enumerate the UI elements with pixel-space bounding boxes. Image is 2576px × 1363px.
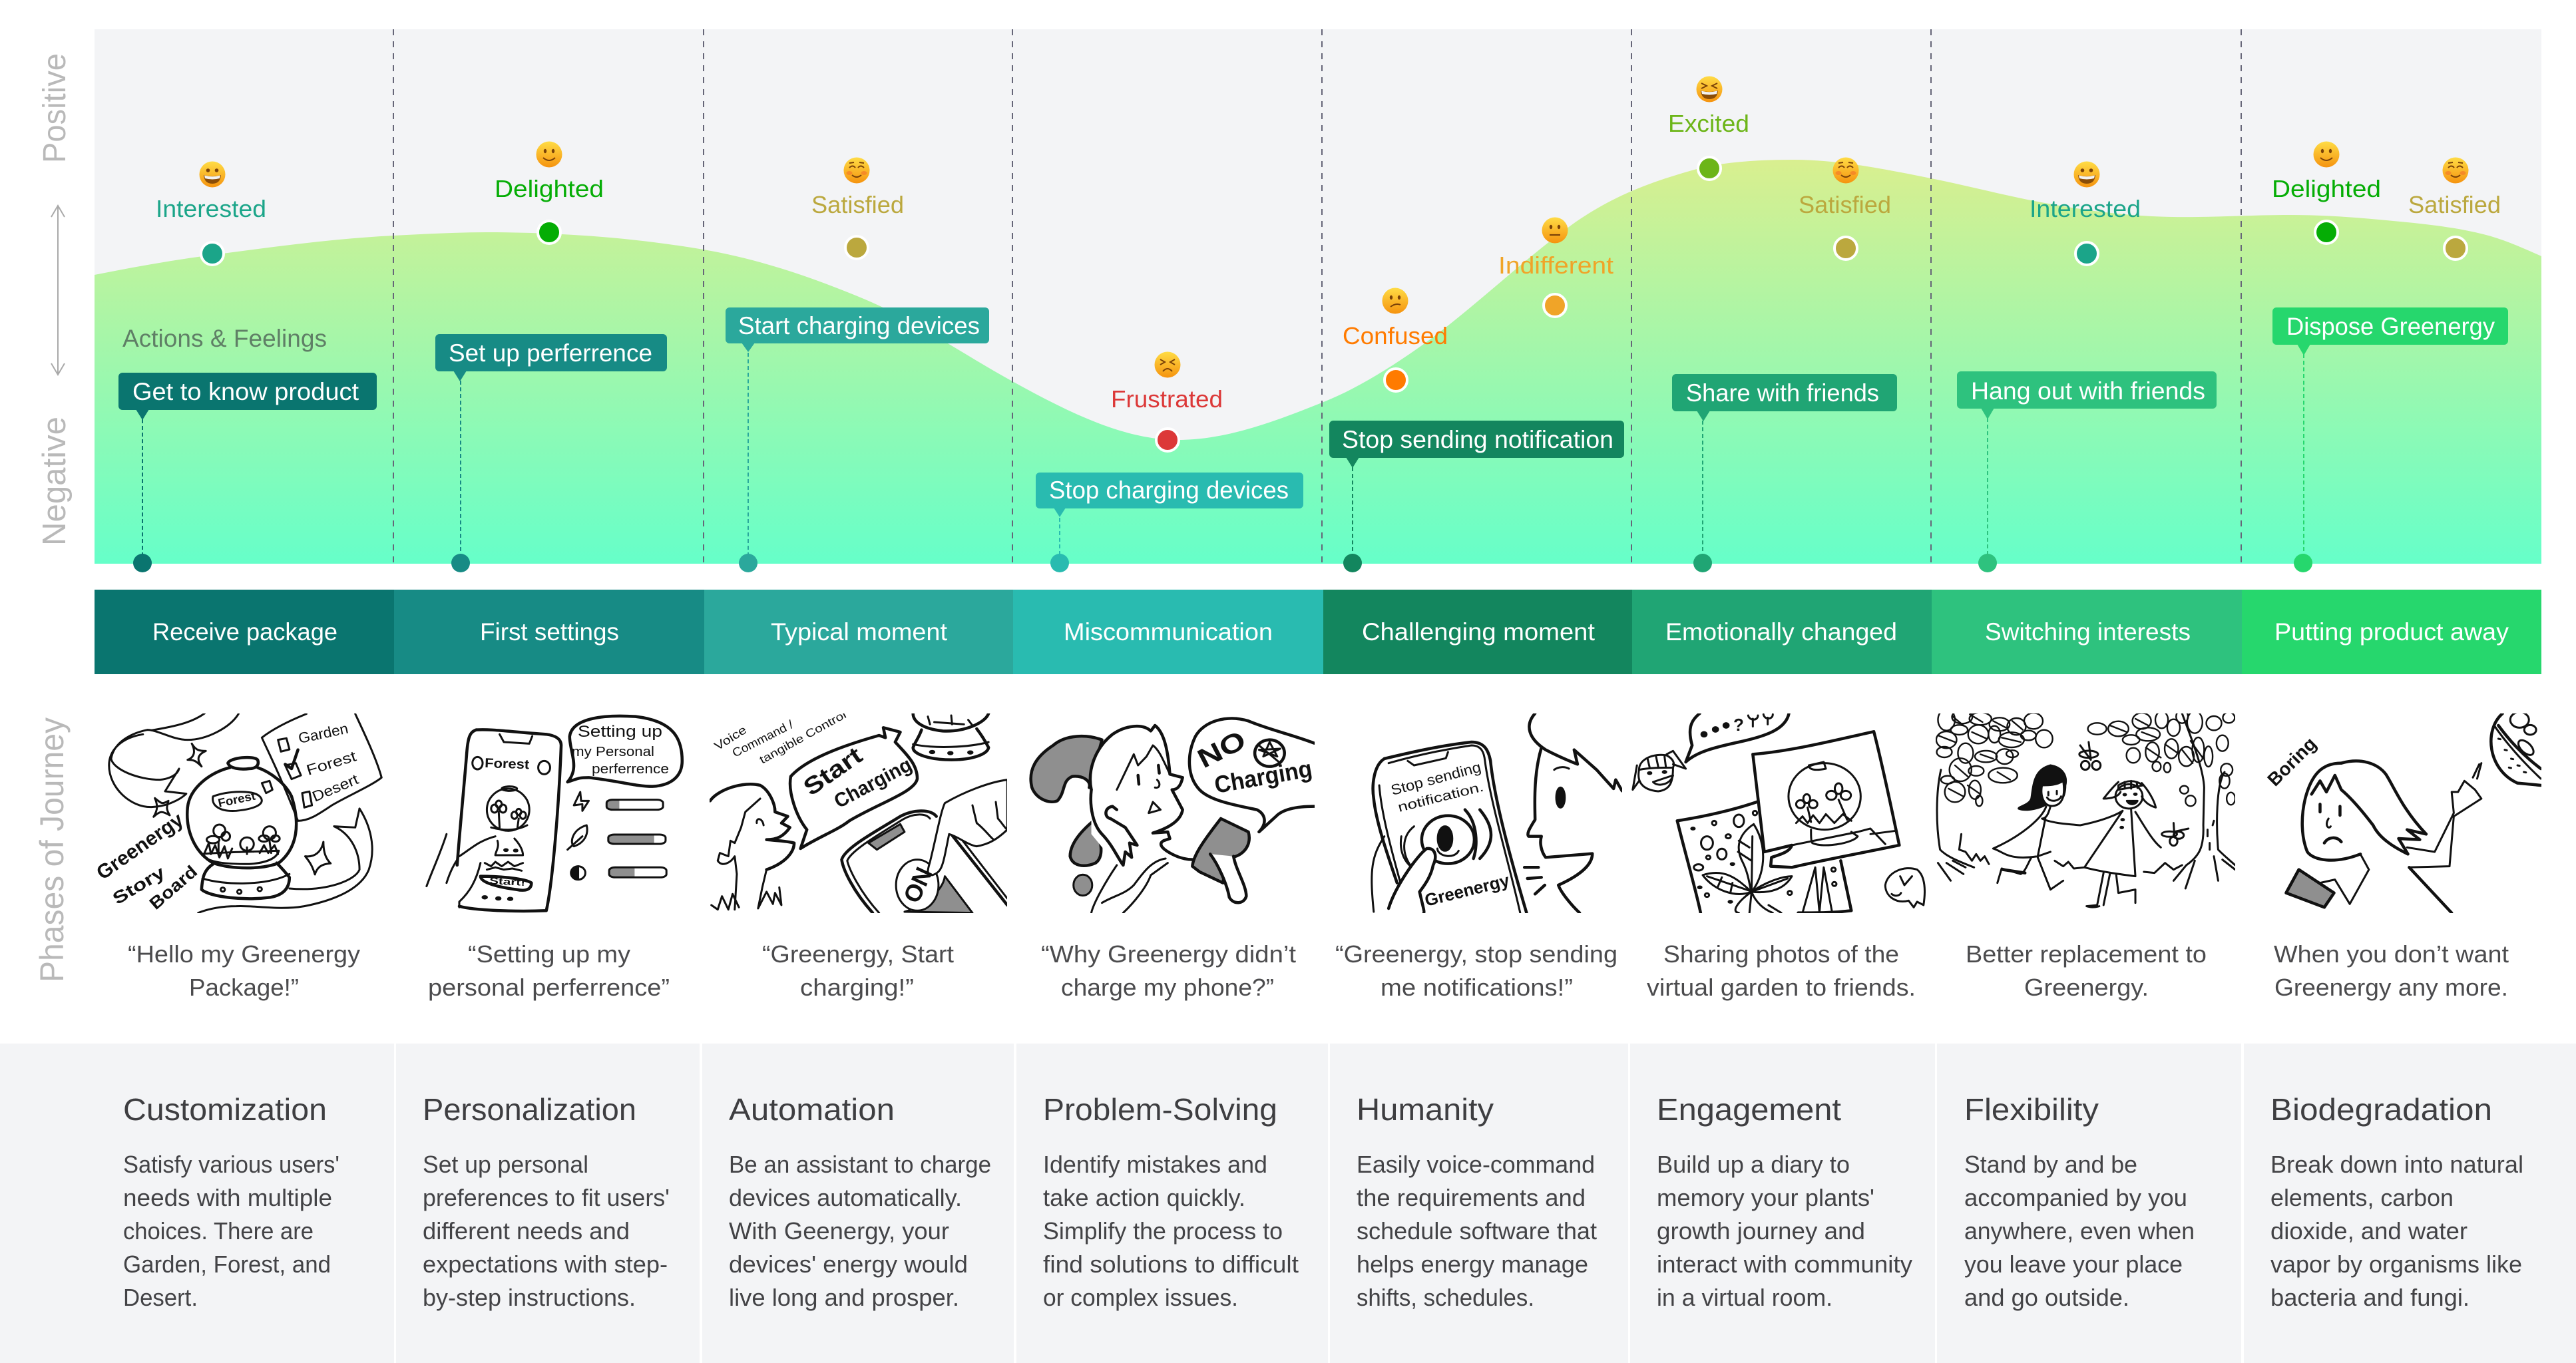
panel: opportunity Personalization: Personalization — [423, 1092, 636, 1127]
panel: opportunity Humanity: Humanity — [1357, 1092, 1494, 1127]
axis arrow: positive to negative — [51, 206, 65, 375]
sketch: phone with personal preference sliders: my Personal — [572, 745, 654, 759]
callout: Dispose Greenergy — [2272, 307, 2508, 572]
panel: opportunity Personalization: different needs and — [423, 1217, 630, 1245]
phase bar: Putting product away: Putting product away — [2274, 618, 2509, 646]
panel: opportunity Humanity: Easily voice-command — [1357, 1151, 1595, 1178]
phase bar: Miscommunication — [1013, 590, 1323, 674]
panel: opportunity Customization: Customization — [123, 1092, 327, 1127]
quote: Why Greenergy didn't charge my phone — [1041, 940, 1296, 1001]
panel: emotion curve chart — [95, 29, 2541, 564]
quote: Greenergy, stop sending me notifications: me notifications!” — [1381, 974, 1573, 1001]
sketch: start charging voice command: Voice — [712, 723, 749, 753]
panel: opportunity Automation: devices' energy would — [729, 1251, 968, 1278]
panel: opportunity Biodegradation: elements, carbon — [2270, 1184, 2454, 1211]
sketch: no charging confused user — [1031, 718, 1314, 913]
callout: Get to know product — [118, 373, 377, 572]
sketch: start charging voice command: tangible Control — [757, 708, 849, 766]
panel: opportunity Flexibility: you leave your place — [1964, 1251, 2183, 1278]
emotion: Confused — [1343, 288, 1448, 391]
sketch: storyboard jar with options: Board — [145, 861, 201, 914]
callout: Get to know product: Get to know product — [132, 378, 359, 405]
quote: Hello my Greenergy Package: “Hello my Greenergy — [128, 940, 360, 968]
emotion: Satisfied (share) — [1799, 157, 1891, 260]
callout: Start charging devices: Start charging devices — [738, 312, 980, 339]
quote: Sharing photos — [1647, 940, 1916, 1001]
sketch: storyboard jar with options — [93, 713, 381, 914]
emotion: Excited — [1668, 76, 1749, 180]
panel: opportunity Customization: Desert. — [123, 1284, 198, 1311]
quote: Better replacement: Better replacement to — [1966, 940, 2207, 968]
sketch: phone with personal preference sliders: Start! — [489, 875, 526, 888]
sketch: start charging voice command: Start — [798, 741, 867, 801]
callout: Stop sending notification — [1329, 421, 1624, 572]
quote: Better replacement: Greenergy. — [2024, 974, 2149, 1001]
quote: Greenergy, Start charging — [762, 940, 954, 1001]
sketch: stop sending notification phone and face: Stop sending — [1389, 759, 1483, 799]
emotion: Satisfied (dispose): Satisfied — [2408, 191, 2501, 218]
sketch: friends dancing among trees — [1936, 709, 2235, 907]
callout: Stop charging devices: Stop charging devices — [1049, 477, 1289, 504]
emotion: Interested (switching): Interested — [2030, 195, 2141, 222]
quote: When you don't want Greenergy: Greenergy any more. — [2274, 974, 2508, 1001]
sketch: boring, throwing product away: Boring — [2263, 733, 2320, 790]
emotion: Interested — [156, 161, 266, 265]
panel: opportunity Engagement: memory your plants' — [1657, 1184, 1874, 1211]
sketch: storyboard jar with options: Greenergy — [93, 809, 188, 884]
sketch: sharing photos of virtual garden: ? — [1733, 715, 1744, 735]
phase bar: Typical moment: Typical moment — [771, 618, 948, 646]
panel: opportunity Flexibility: and go outside. — [1964, 1284, 2129, 1311]
quote: Greenergy, stop sending me notifications: “Greenergy, stop sending — [1335, 940, 1617, 968]
heading: Actions & Feelings: Actions & Feelings — [122, 325, 327, 352]
callout: Dispose Greenergy: Dispose Greenergy — [2286, 313, 2495, 340]
emotion: Satisfied: Satisfied — [811, 191, 904, 218]
phase bar: Switching interests: Switching interests — [1985, 618, 2191, 646]
axis label: Positive: Positive — [37, 53, 73, 163]
phase bar: Emotionally changed — [1632, 590, 1932, 674]
callout: Hang out with friends — [1957, 371, 2217, 572]
panel: opportunity Biodegradation: Break down into natural — [2270, 1151, 2523, 1178]
panel: opportunity Humanity — [1330, 1044, 1628, 1363]
quote: Why Greenergy didn't charge my phone: charge my phone?” — [1061, 974, 1274, 1001]
quote: Greenergy, stop sending me notifications — [1335, 940, 1617, 1001]
emotion: Delighted (dispose) — [2272, 141, 2381, 244]
phase bar: Switching interests — [1932, 590, 2242, 674]
panel: opportunity Customization: Garden, Forest, and — [123, 1251, 331, 1278]
callout: Set up perferrence: Set up perferrence — [449, 339, 652, 367]
emotion: Confused: Confused — [1343, 322, 1448, 349]
callout: Start charging devices — [726, 307, 989, 572]
axis label: Phases of Journey: Phases of Journey — [33, 717, 71, 982]
emotion: Satisfied — [811, 157, 904, 259]
panel: opportunity Personalization: preferences to fit users' — [423, 1184, 670, 1211]
callout: Share with friends — [1672, 374, 1897, 572]
panel: opportunity Automation: With Geenergy, your — [729, 1217, 949, 1245]
panel: opportunity Problem-Solving: take action quickly. — [1043, 1184, 1245, 1211]
emotion: Delighted — [495, 141, 604, 244]
sketch: no charging confused user: Charging — [1212, 755, 1314, 799]
emotion: Interested (switching) — [2030, 161, 2141, 265]
callout: Set up perferrence — [435, 334, 667, 572]
sketch: boring, throwing product away — [2263, 712, 2541, 913]
panel: opportunity Personalization: Set up personal — [423, 1151, 588, 1178]
sketch: phone with personal preference sliders: Forest — [485, 756, 530, 772]
panel: opportunity Biodegradation — [2244, 1044, 2576, 1363]
sketch: no charging confused user: NO — [1193, 725, 1251, 774]
panel: opportunity Automation: live long and prosper. — [729, 1284, 959, 1311]
panel: opportunity Biodegradation: dioxide, and water — [2270, 1217, 2468, 1245]
panel: opportunity Engagement — [1630, 1044, 1935, 1363]
quote: Why Greenergy didn't charge my phone: “Why Greenergy didn’t — [1041, 940, 1296, 968]
phase bar: First settings: First settings — [480, 618, 619, 646]
emotion: Delighted (dispose): Delighted — [2272, 175, 2381, 202]
quote: Hello my Greenergy Package: Package!” — [189, 974, 299, 1001]
emotion: Satisfied (dispose) — [2408, 157, 2501, 260]
quote: Setting up my personal perferrence: “Setting up my — [468, 940, 630, 968]
quote: Sharing photos: Sharing photos of the — [1663, 940, 1899, 968]
sketch: stop sending notification phone and face: notification. — [1396, 780, 1485, 815]
emotion: Indifferent: Indifferent — [1498, 252, 1613, 279]
panel: opportunity Personalization: by-step instructions. — [423, 1284, 636, 1311]
sketch: start charging voice command: Command / — [730, 717, 795, 760]
emotion: Excited: Excited — [1668, 110, 1749, 137]
sketch: sharing photos of virtual garden — [1633, 713, 1925, 913]
panel: opportunity Problem-Solving: find solutions to difficult — [1043, 1251, 1299, 1278]
emotion: Frustrated — [1111, 351, 1223, 451]
sketch: stop sending notification phone and face: Greenergy — [1422, 870, 1512, 910]
emotion area curve — [95, 160, 2541, 564]
sketch: storyboard jar with options: Forest — [304, 747, 358, 779]
emotion: Frustrated: Frustrated — [1111, 385, 1223, 413]
panel: opportunity Problem-Solving — [1016, 1044, 1328, 1363]
sketch: phone with personal preference sliders: perferrence — [592, 762, 669, 777]
sketch: storyboard jar with options: Garden — [297, 720, 349, 747]
sketch: stop sending notification phone and face — [1372, 713, 1622, 913]
quote: Sharing photos: virtual garden to friends. — [1647, 974, 1916, 1001]
panel: opportunity Flexibility — [1937, 1044, 2241, 1363]
callout: Hang out with friends: Hang out with friends — [1971, 377, 2205, 405]
sketch: phone with personal preference sliders — [427, 716, 682, 911]
phase bar: Miscommunication: Miscommunication — [1064, 618, 1273, 646]
quote: Greenergy, Start charging: charging!” — [800, 974, 914, 1001]
phase bar: Receive package — [95, 590, 394, 674]
panel: opportunity Humanity: helps energy manage — [1357, 1251, 1588, 1278]
panel: opportunity Problem-Solving: Identify mistakes and — [1043, 1151, 1267, 1178]
quote: Greenergy, Start charging: “Greenergy, Start — [762, 940, 954, 968]
panel: opportunity Automation: Automation — [729, 1092, 895, 1127]
sketch: phone with personal preference sliders: Setting up — [578, 723, 662, 741]
quote: When you don't want Greenergy — [2274, 940, 2509, 1001]
sketch: storyboard jar with options: Forest — [217, 789, 257, 810]
panel: opportunity Biodegradation: vapor by organisms like — [2270, 1251, 2522, 1278]
panel: opportunity Problem-Solving: Simplify the process to — [1043, 1217, 1283, 1245]
panel: opportunity Customization: choices. There are — [123, 1217, 314, 1245]
panel: opportunity Flexibility: anywhere, even when — [1964, 1217, 2195, 1245]
panel: opportunity Problem-Solving: Problem-Solving — [1043, 1092, 1277, 1127]
panel: opportunity Biodegradation: bacteria and fungi. — [2270, 1284, 2469, 1311]
panel: opportunity Humanity: the requirements and — [1357, 1184, 1586, 1211]
panel: opportunity Biodegradation: Biodegradation — [2270, 1092, 2492, 1127]
panel: opportunity Engagement: Engagement — [1657, 1092, 1841, 1127]
phase bar: First settings — [394, 590, 704, 674]
quote: When you don't want Greenergy: When you don’t want — [2274, 940, 2509, 968]
panel: opportunity Personalization: expectations with step- — [423, 1251, 668, 1278]
sketch: storyboard jar with options: Story — [109, 862, 168, 908]
axis label: Negative: Negative — [37, 417, 73, 546]
sketch: start charging voice command — [710, 708, 1007, 913]
phase bar: Putting product away — [2242, 590, 2541, 674]
panel: opportunity Engagement: Build up a diary to — [1657, 1151, 1850, 1178]
quote: Setting up my personal perferrence: personal perferrence” — [428, 974, 670, 1001]
sketch: start charging voice command: Charging — [831, 753, 915, 813]
emotion: Indifferent — [1498, 217, 1613, 317]
panel: opportunity Flexibility: accompanied by you — [1964, 1184, 2187, 1211]
callout: Stop charging devices — [1036, 473, 1303, 572]
emotion: Satisfied (share): Satisfied — [1799, 191, 1891, 218]
emotion: Delighted: Delighted — [495, 175, 604, 202]
callout: Stop sending notification: Stop sending notification — [1342, 426, 1613, 453]
panel: opportunity Problem-Solving: or complex issues. — [1043, 1284, 1238, 1311]
panel: opportunity Humanity: schedule software that — [1357, 1217, 1597, 1245]
panel: opportunity Personalization — [396, 1044, 700, 1363]
panel: opportunity Automation: devices automatically. — [729, 1184, 962, 1211]
quote: Better replacement — [1966, 940, 2207, 1001]
callout: Share with friends: Share with friends — [1686, 379, 1879, 407]
panel: opportunity Engagement: interact with community — [1657, 1251, 1912, 1278]
quote: Hello my Greenergy Package — [128, 940, 360, 1001]
panel: opportunity Flexibility: Stand by and be — [1964, 1151, 2137, 1178]
phase bar: Challenging moment: Challenging moment — [1362, 618, 1596, 646]
panel: opportunity Customization — [0, 1044, 394, 1363]
phase bar: Emotionally changed: Emotionally changed — [1665, 618, 1897, 646]
phase bar: Typical moment — [704, 590, 1013, 674]
sketch: storyboard jar with options: Desert — [310, 771, 361, 805]
panel: opportunity Automation — [702, 1044, 1014, 1363]
phase bar: Challenging moment — [1323, 590, 1632, 674]
panel: opportunity Engagement: growth journey and — [1657, 1217, 1865, 1245]
quote: Setting up my personal perferrence — [428, 940, 670, 1001]
emotion: Interested: Interested — [156, 195, 266, 222]
panel: opportunity Engagement: in a virtual room. — [1657, 1284, 1832, 1311]
phase bar: Receive package: Receive package — [152, 618, 337, 646]
panel: opportunity Customization: needs with multiple — [123, 1184, 332, 1211]
axis label: Opportunities: Opportunities — [33, 1111, 71, 1314]
panel: opportunity Humanity: shifts, schedules. — [1357, 1284, 1534, 1311]
sketch: start charging voice command: ON — [898, 863, 938, 907]
panel: opportunity Automation: Be an assistant to charge — [729, 1151, 991, 1178]
panel: opportunity Customization: Satisfy various users' — [123, 1151, 339, 1178]
panel: opportunity Flexibility: Flexibility — [1964, 1092, 2099, 1127]
